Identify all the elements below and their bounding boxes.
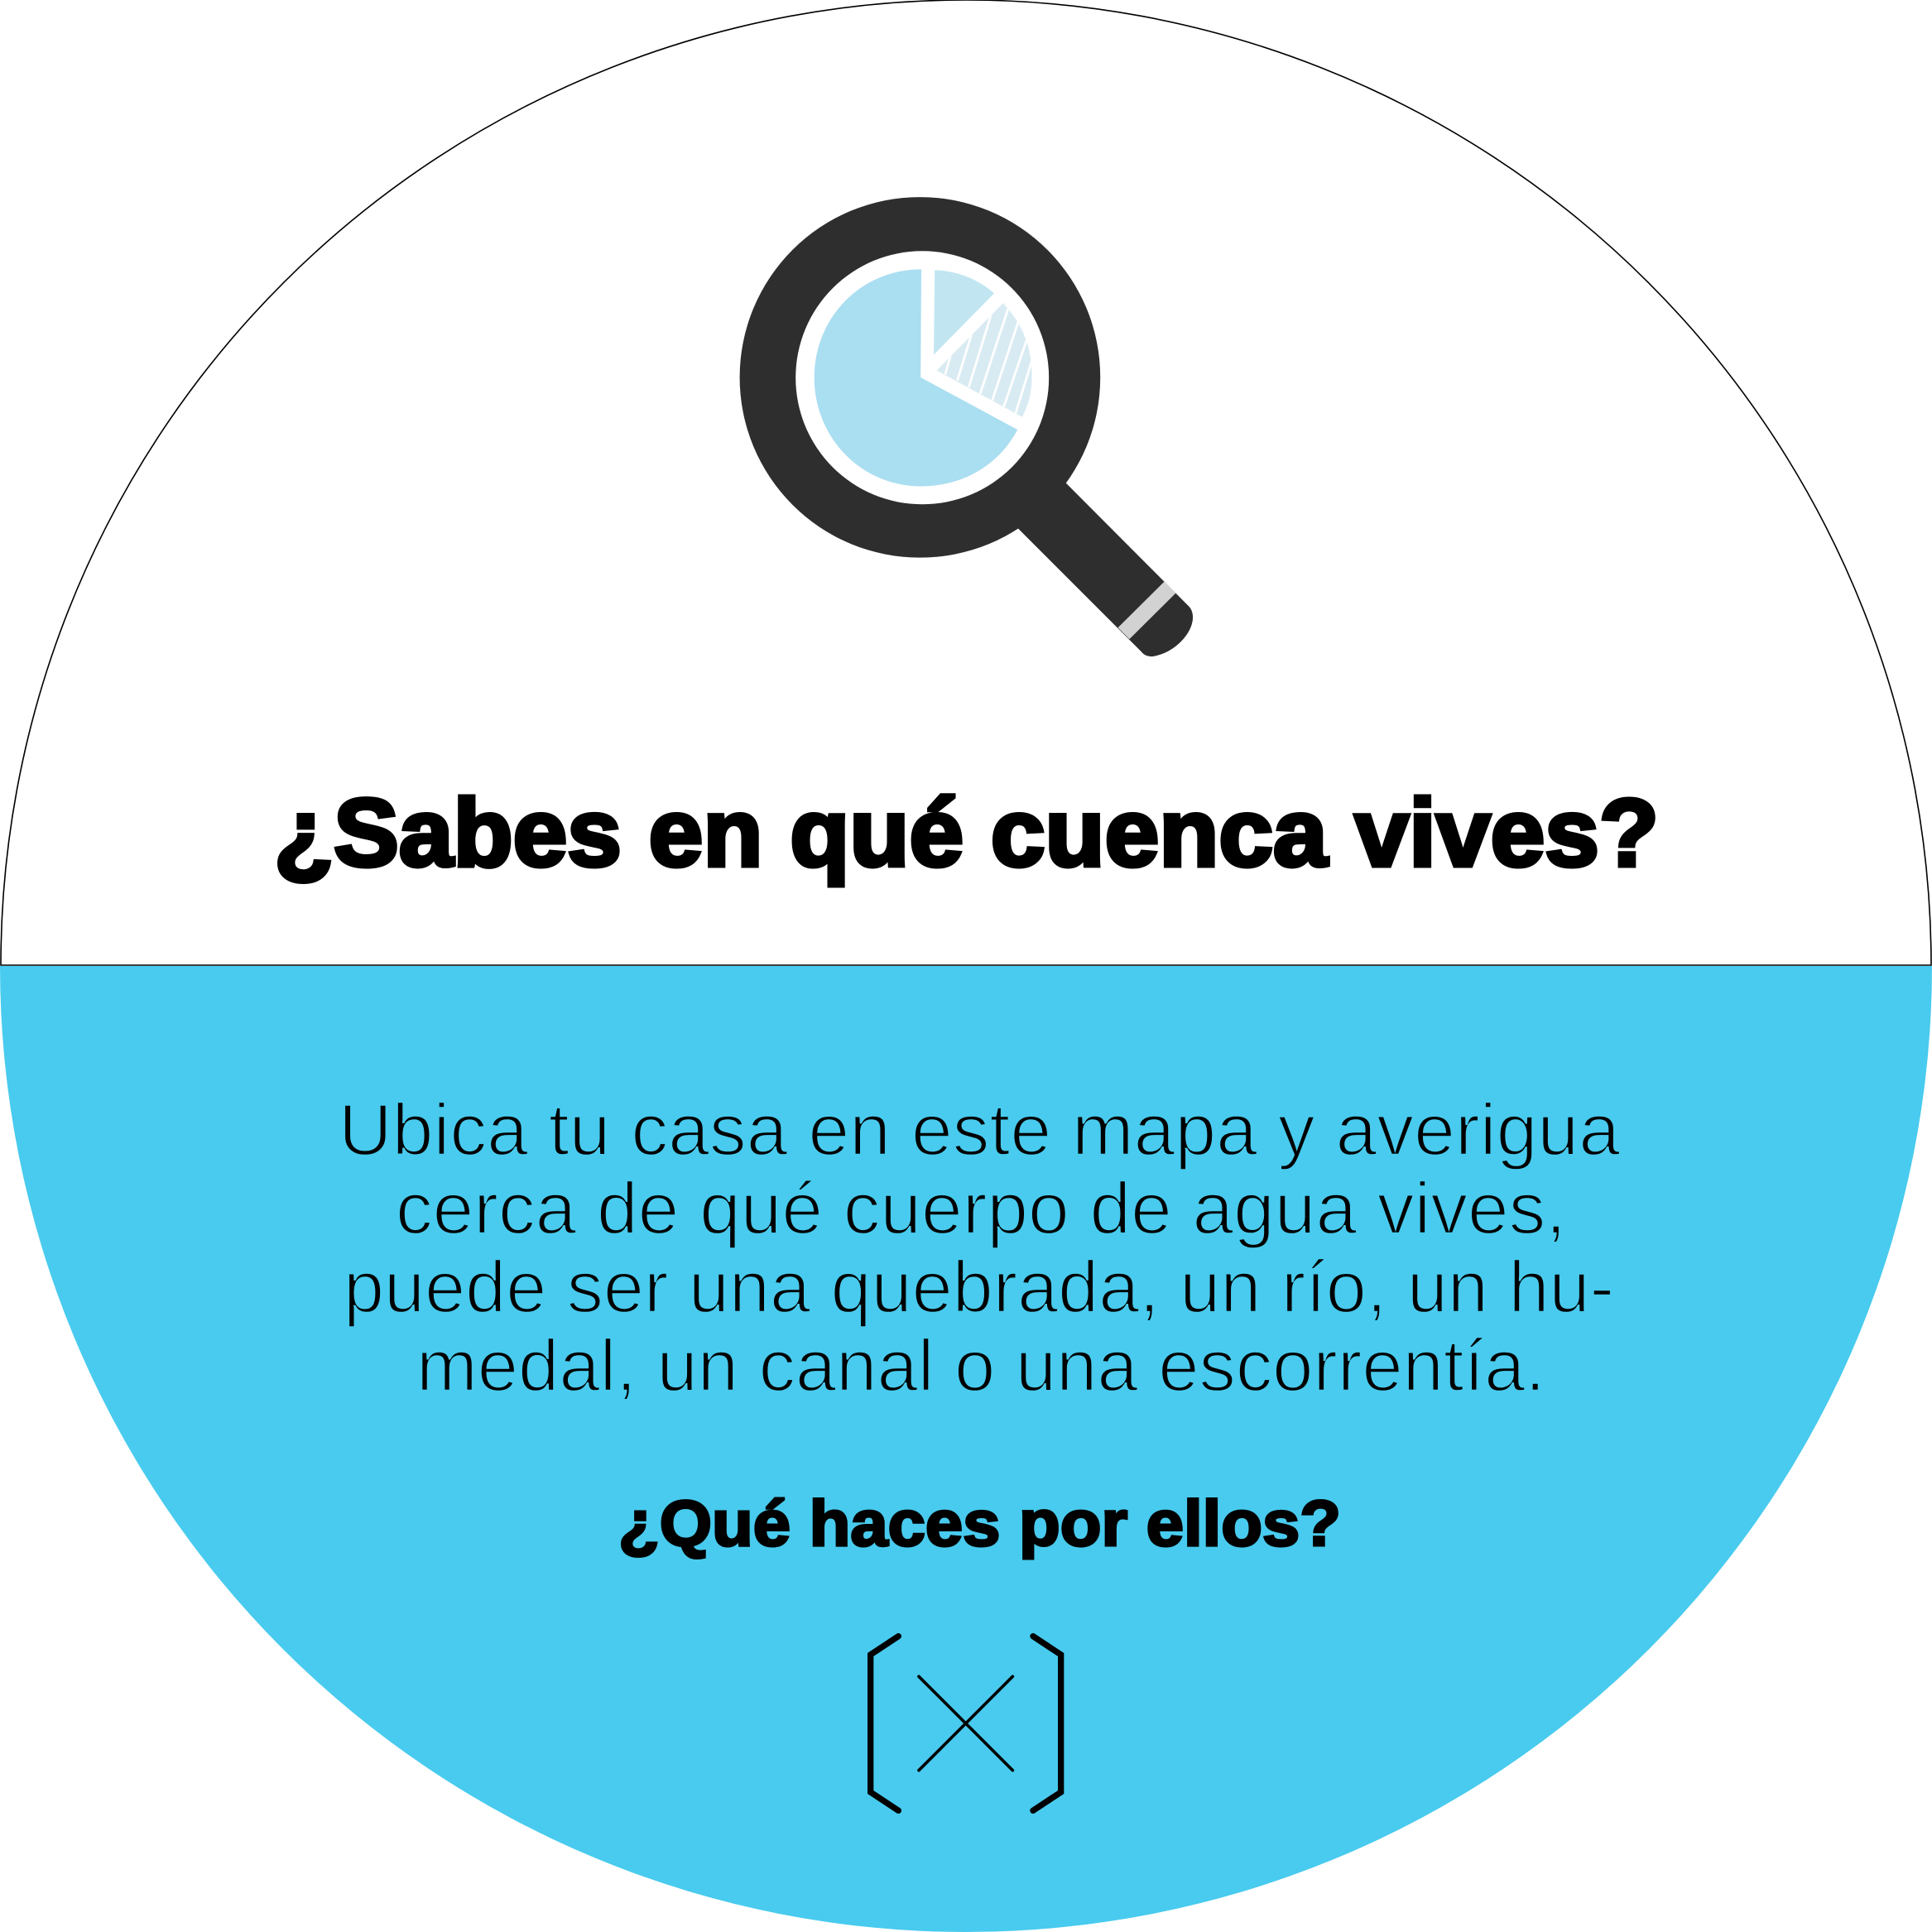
text block: instructions: cerca de qué cuerpo de agua vives, [396, 1167, 1566, 1249]
text block: instructions [339, 1089, 1620, 1406]
text block: instructions: puede ser una quebrada, un río, un hu- [344, 1246, 1614, 1328]
magnifier ring [740, 197, 1100, 558]
X mark [919, 1676, 1012, 1771]
pie slice: main [815, 269, 1017, 487]
subheading: ¿Qué haces por ellos? [618, 1487, 1341, 1560]
right bracket [1033, 1636, 1061, 1810]
handle band [1118, 582, 1176, 639]
title: ¿Sabes en qué cuenca vives? [274, 779, 1659, 887]
text block: instructions: Ubica tu casa en este mapa y averigua [339, 1089, 1620, 1170]
panel: bottom blue half circle [0, 966, 1932, 1932]
icon: bracketed X [871, 1636, 1061, 1810]
icon: magnifying glass with pie chart [740, 197, 1193, 656]
text block: instructions: medal, un canal o una escorrentía. [416, 1324, 1545, 1406]
magnifier handle [1007, 483, 1193, 656]
magnifier lens [795, 251, 1049, 504]
panel: top white half circle [1, 0, 1931, 965]
pie slice: hatched [937, 303, 1032, 417]
pie slice: light [934, 270, 994, 355]
left bracket [871, 1636, 898, 1810]
